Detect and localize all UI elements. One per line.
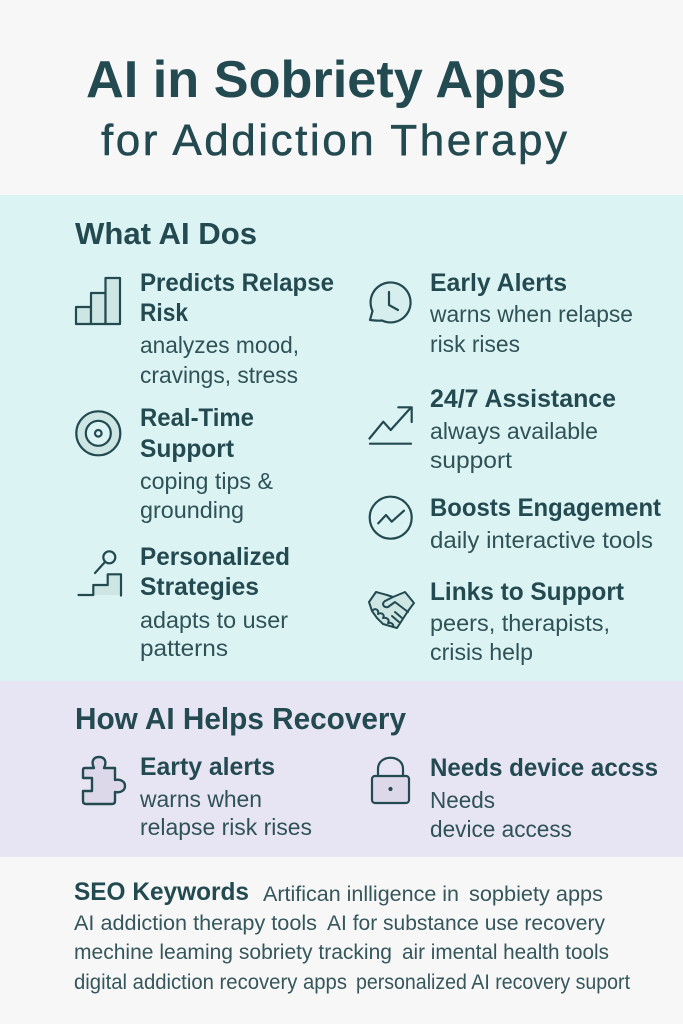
icon: padlock xyxy=(372,758,409,803)
item: Needs device accss: Needs device accss xyxy=(430,754,658,782)
title xyxy=(86,51,567,165)
icon: bar chart xyxy=(76,278,120,324)
icon: puzzle piece xyxy=(83,757,125,804)
item: Links to Support xyxy=(369,578,625,665)
item: Personalized Strategies: adapts to user xyxy=(140,607,288,633)
item: Links to Support: peers, therapists, xyxy=(430,610,610,636)
panel: How AI Helps Recovery xyxy=(0,681,683,857)
item: 24/7 Assistance xyxy=(370,385,616,473)
icon: circled line chart xyxy=(370,497,412,539)
item: Real-Time Support: coping tips & xyxy=(140,468,273,494)
item: Links to Support: Links to Support xyxy=(430,578,625,606)
item: Needs device accss: device access xyxy=(430,816,572,842)
keyword list: personalized AI recovery suport xyxy=(356,971,630,994)
item: Earty alerts: Earty alerts xyxy=(140,753,275,781)
keyword list: AI for substance use recovery xyxy=(327,912,605,935)
keyword list: digital addiction recovery apps xyxy=(74,971,347,994)
item: Predicts Relapse Risk: Risk xyxy=(140,299,188,327)
icon: clock speech bubble xyxy=(370,282,411,322)
title: for Addiction Therapy xyxy=(101,116,567,165)
item: Links to Support: crisis help xyxy=(430,639,533,665)
item: Personalized Strategies: Strategies xyxy=(140,573,259,601)
item: Earty alerts: warns when xyxy=(139,786,262,812)
item: Needs device accss xyxy=(372,754,658,842)
panel: SEO Keywords xyxy=(74,878,630,994)
item: Boosts Engagement: Boosts Engagement xyxy=(430,494,662,522)
icon: handshake xyxy=(369,592,414,628)
item: Boosts Engagement xyxy=(370,494,662,553)
item: Real-Time Support: Real-Time xyxy=(140,404,254,432)
item: Real-Time Support: Support xyxy=(140,435,235,463)
item: Predicts Relapse Risk: analyzes mood, xyxy=(140,332,299,358)
item: Boosts Engagement: daily interactive tools xyxy=(430,527,653,553)
icon: stairs with goal marker xyxy=(78,551,121,596)
keyword list: AI addiction therapy tools xyxy=(74,912,317,935)
item: Real-Time Support: grounding xyxy=(140,497,244,523)
panel: What AI Dos xyxy=(0,195,683,681)
item: Early Alerts: Early Alerts xyxy=(430,269,567,297)
heading: SEO Keywords: SEO Keywords xyxy=(74,878,249,906)
title: AI in Sobriety Apps xyxy=(86,51,566,109)
item: Earty alerts xyxy=(83,753,312,840)
keyword list: air imental health tools xyxy=(402,941,609,964)
item: Earty alerts: relapse risk rises xyxy=(140,814,312,840)
heading: What AI Dos: What AI Dos xyxy=(75,216,257,251)
item: 24/7 Assistance: support xyxy=(430,447,513,473)
item: Real-Time Support xyxy=(76,404,273,523)
heading: How AI Helps Recovery: How AI Helps Recovery xyxy=(75,701,407,736)
item: Predicts Relapse Risk: Predicts Relapse xyxy=(140,269,334,297)
item: 24/7 Assistance: always available xyxy=(430,418,598,444)
item: Personalized Strategies: patterns xyxy=(140,635,228,661)
keyword list: sopbiety apps xyxy=(469,883,603,906)
keyword list: mechine leaming sobriety tracking xyxy=(74,941,392,964)
item: Personalized Strategies: Personalized xyxy=(140,543,290,571)
item: 24/7 Assistance: 24/7 Assistance xyxy=(430,385,616,413)
keyword list xyxy=(74,883,630,994)
item: Predicts Relapse Risk: cravings, stress xyxy=(140,362,298,388)
item: Early Alerts: warns when relapse xyxy=(429,301,633,327)
item: Personalized Strategies xyxy=(78,543,290,661)
keyword list: Artifican inlligence in xyxy=(263,883,459,906)
item: Predicts Relapse Risk xyxy=(76,269,334,388)
item: Needs device accss: Needs xyxy=(430,787,495,813)
item: Early Alerts: risk rises xyxy=(430,331,520,357)
icon: target xyxy=(76,411,120,455)
icon: rising trend arrow xyxy=(370,407,412,444)
item: Early Alerts xyxy=(370,269,633,357)
